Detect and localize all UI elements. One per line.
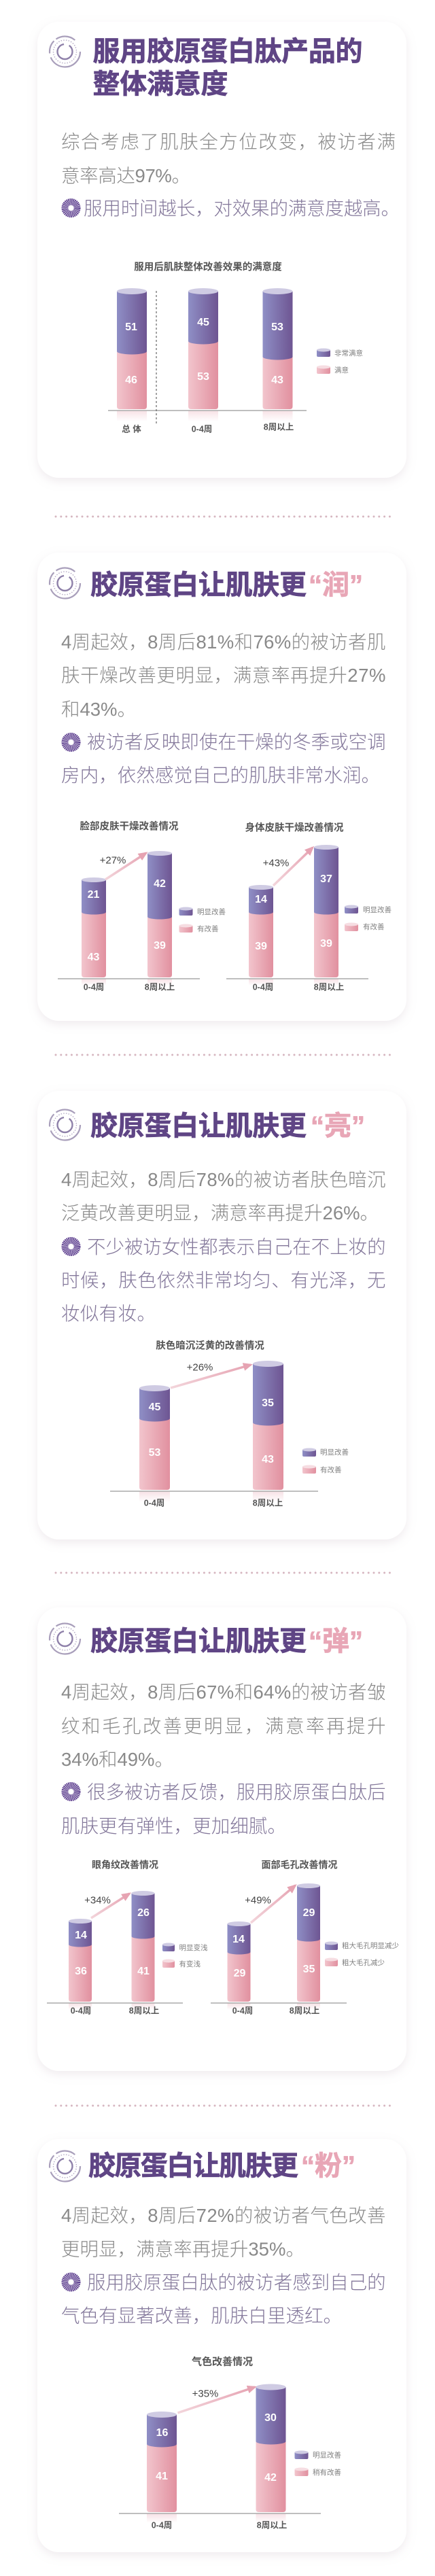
bar chart: face dryness: 39	[154, 940, 166, 952]
heading: “亮”	[311, 1111, 365, 1141]
text block: summary: 肤干燥改善更明显，满意率再提升27%	[61, 665, 386, 686]
icon: purple burst bullet	[65, 736, 77, 748]
legend: pores: 粗大毛孔减少	[342, 1958, 385, 1967]
text block: summary	[61, 631, 386, 720]
legend	[317, 348, 363, 375]
bar chart: complexion: 16	[156, 2427, 169, 2439]
bar chart: body dryness: 8周以上	[314, 983, 344, 992]
bar chart: pores: 0-4周	[232, 2006, 253, 2016]
bar chart: crow's feet: 41	[137, 1966, 150, 1977]
text block: summary: 纹和毛孔改善更明显，满意率再提升	[61, 1716, 386, 1737]
panel: firmer skin	[37, 1607, 406, 2071]
text block: summary	[61, 1682, 386, 1770]
bar chart: skin tone	[110, 1361, 318, 1508]
text block: bullet note: 气色有显著改善，肌肤白里透红。	[61, 2305, 342, 2326]
panel: moisturised skin	[37, 553, 406, 1021]
bar chart: complexion: 0-4周	[152, 2521, 172, 2530]
bar chart: crow's feet	[47, 1891, 183, 2016]
icon: ring emblem	[50, 568, 80, 598]
bar chart: complexion: +35%	[192, 2388, 218, 2399]
legend	[295, 2451, 341, 2477]
panel: rosy skin	[37, 2139, 406, 2552]
bar chart: body dryness: 14	[255, 894, 267, 905]
legend: 非常满意	[334, 349, 363, 358]
bar chart: body dryness: 0-4周	[253, 983, 273, 992]
legend: face: 有改善	[197, 924, 219, 933]
bar chart: pores: 35	[303, 1964, 315, 1975]
legend: 满意	[334, 366, 349, 375]
bar chart: crow's feet: +34%	[84, 1894, 111, 1906]
text block: bullet note: 不少被访女性都表示自己在不上妆的	[87, 1236, 386, 1257]
heading: 整体满意度	[92, 69, 228, 99]
bar chart: complexion	[119, 2384, 321, 2530]
bar chart: crow's feet: 36	[75, 1966, 87, 1977]
chart title: 气色改善情况	[192, 2355, 253, 2367]
bar chart: body dryness: 39	[320, 938, 332, 950]
bar chart: skin tone: +26%	[187, 1361, 213, 1373]
legend: 明显改善	[320, 1448, 349, 1457]
bar chart: face dryness: 43	[88, 952, 99, 963]
bar chart: overall satisfaction: 8周以上	[264, 423, 294, 432]
text block: summary: 4周起效，8周后72%的被访者气色改善	[61, 2205, 386, 2226]
legend: 明显改善	[313, 2451, 341, 2459]
text block: bullet note: 很多被访者反馈，服用胶原蛋白肽后	[87, 1781, 386, 1803]
chart title: face: 脸部皮肤干燥改善情况	[80, 820, 179, 832]
panel background	[37, 1607, 406, 2071]
bar chart: crow's feet: 0-4周	[71, 2006, 91, 2016]
legend: pores	[325, 1941, 399, 1967]
text block: bullet note: 服用时间越长，对效果的满意度越高。	[84, 198, 400, 219]
text block: summary: 4周起效，8周后81%和76%的被访者肌	[61, 631, 386, 652]
bar chart: overall satisfaction: 45	[197, 317, 209, 328]
text block: summary: 4周起效，8周后78%的被访者肤色暗沉	[61, 1169, 386, 1190]
panel: overall satisfaction	[37, 22, 406, 478]
icon: ring emblem	[50, 2151, 80, 2182]
bar chart: overall satisfaction: 43	[271, 375, 283, 386]
legend: crow's feet	[162, 1943, 208, 1968]
bar chart: skin tone: 8周以上	[253, 1499, 283, 1508]
bar chart: complexion: 8周以上	[257, 2521, 287, 2530]
icon: ring emblem	[50, 1109, 80, 1141]
chart title: body: 身体皮肤干燥改善情况	[245, 821, 344, 833]
text block: bullet note	[61, 1236, 386, 1324]
heading: “弹”	[309, 1626, 363, 1656]
bar chart: crow's feet: 26	[137, 1907, 150, 1919]
icon: ring emblem	[50, 1623, 80, 1654]
bar chart: pores	[211, 1883, 347, 2016]
bar chart: overall satisfaction: 53	[271, 321, 283, 333]
text block: bullet note: 肌肤更有弹性，更加细腻。	[61, 1815, 286, 1837]
heading	[92, 37, 363, 99]
chart title: 肤色暗沉泛黄的改善情况	[156, 1339, 264, 1351]
legend: 稍有改善	[313, 2468, 341, 2477]
bar chart: pores: 29	[234, 1968, 246, 1979]
bar chart: body dryness: 39	[255, 941, 267, 952]
bar chart: overall satisfaction: 53	[197, 371, 209, 383]
icon: purple burst bullet	[65, 1786, 77, 1798]
text block: summary: 和43%。	[61, 699, 136, 720]
legend: body: 有改善	[363, 922, 385, 931]
bar chart: crow's feet: 14	[75, 1930, 87, 1941]
bar chart: crow's feet: 8周以上	[129, 2006, 159, 2016]
legend: 有改善	[320, 1465, 341, 1474]
text block: bullet note: 服用胶原蛋白肽的被访者感到自己的	[87, 2272, 386, 2293]
bar chart: overall satisfaction: 46	[125, 375, 137, 386]
legend: body	[345, 905, 392, 931]
chart title: 服用后肌肤整体改善效果的满意度	[134, 260, 282, 273]
chart title: crow's feet: 眼角纹改善情况	[92, 1859, 158, 1870]
bar chart: skin tone: 43	[262, 1454, 274, 1465]
text block: bullet note	[61, 1781, 386, 1837]
bar chart: face dryness	[58, 851, 200, 992]
bar chart: skin tone: 45	[149, 1402, 160, 1413]
text block: summary: 泛黄改善更明显，满意率再提升26%。	[61, 1202, 379, 1223]
legend: pores: 粗大毛孔明显减少	[342, 1941, 399, 1950]
text block: bullet note	[61, 731, 386, 786]
bar chart: pores: +49%	[245, 1894, 271, 1906]
bar chart: complexion: 42	[264, 2472, 277, 2484]
chart title: pores: 面部毛孔改善情况	[261, 1859, 337, 1870]
heading: 胶原蛋白让肌肤更	[90, 1111, 307, 1141]
text block: summary: 更明显，满意率再提升35%。	[61, 2239, 304, 2259]
legend: face	[179, 907, 226, 933]
bar chart: face dryness: 21	[88, 889, 99, 901]
icon: ring emblem	[50, 37, 80, 67]
bar chart: skin tone: 53	[149, 1447, 160, 1459]
bar chart: overall satisfaction: 0-4周	[192, 425, 212, 434]
bar chart: overall satisfaction	[108, 288, 307, 434]
legend: face: 明显改善	[197, 907, 226, 916]
heading: 服用胶原蛋白肽产品的	[92, 37, 363, 67]
bar chart: body dryness: +43%	[263, 857, 289, 869]
bar chart: face dryness: 0-4周	[84, 983, 104, 992]
heading: “润”	[309, 570, 363, 600]
bar chart: pores: 29	[303, 1907, 315, 1919]
bar chart: body dryness: 37	[320, 873, 332, 885]
bar chart: skin tone: 35	[262, 1397, 274, 1409]
bar chart: pores: 14	[232, 1934, 245, 1945]
text block: bullet note: 房内，依然感觉自己的肌肤非常水润。	[61, 765, 380, 786]
text block: bullet note: 被访者反映即使在干燥的冬季或空调	[87, 731, 386, 752]
bar chart: complexion: 30	[264, 2412, 277, 2424]
text block: summary: 意率高达97%。	[61, 165, 190, 186]
bar chart: pores: 8周以上	[290, 2006, 319, 2016]
bar chart: overall satisfaction: 51	[125, 321, 137, 333]
bar chart: face dryness: 8周以上	[145, 983, 175, 992]
legend: crow's feet: 明显变浅	[179, 1943, 208, 1952]
panel background	[37, 553, 406, 1021]
heading: 胶原蛋白让肌肤更	[90, 570, 307, 600]
icon: purple burst bullet	[65, 202, 77, 214]
bar chart: overall satisfaction: 总 体	[122, 424, 141, 434]
legend: crow's feet: 有变浅	[179, 1960, 201, 1968]
text block: bullet note	[61, 2272, 386, 2326]
heading: 胶原蛋白让肌肤更	[88, 2151, 298, 2181]
text block: summary: 4周起效，8周后67%和64%的被访者皱	[61, 1682, 386, 1703]
bar chart: complexion: 41	[156, 2471, 168, 2482]
icon: purple burst bullet	[65, 1240, 77, 1253]
text block: summary: 综合考虑了肌肤全方位改变，被访者满	[61, 131, 396, 152]
legend	[302, 1448, 349, 1474]
text block: summary	[61, 131, 396, 186]
text block: bullet note: 妆似有妆。	[61, 1303, 156, 1324]
bar chart: face dryness: +27%	[100, 854, 126, 866]
panel: brighter skin	[37, 1091, 406, 1539]
heading: 胶原蛋白让肌肤更	[90, 1626, 307, 1656]
legend: body: 明显改善	[363, 905, 392, 914]
heading: “粉”	[301, 2151, 355, 2181]
panel background	[37, 22, 406, 478]
text block: summary	[61, 2205, 386, 2259]
bar chart: skin tone: 0-4周	[144, 1499, 164, 1508]
icon: purple burst bullet	[65, 2276, 77, 2288]
text block: summary: 34%和49%。	[61, 1749, 173, 1770]
bar chart: body dryness	[226, 845, 368, 992]
text block: bullet note: 时候，肤色依然非常均匀、有光泽，无	[61, 1270, 386, 1291]
panel background	[37, 2139, 406, 2552]
panel background	[37, 1091, 406, 1539]
bar chart: face dryness: 42	[154, 878, 166, 890]
text block: summary	[61, 1169, 386, 1223]
